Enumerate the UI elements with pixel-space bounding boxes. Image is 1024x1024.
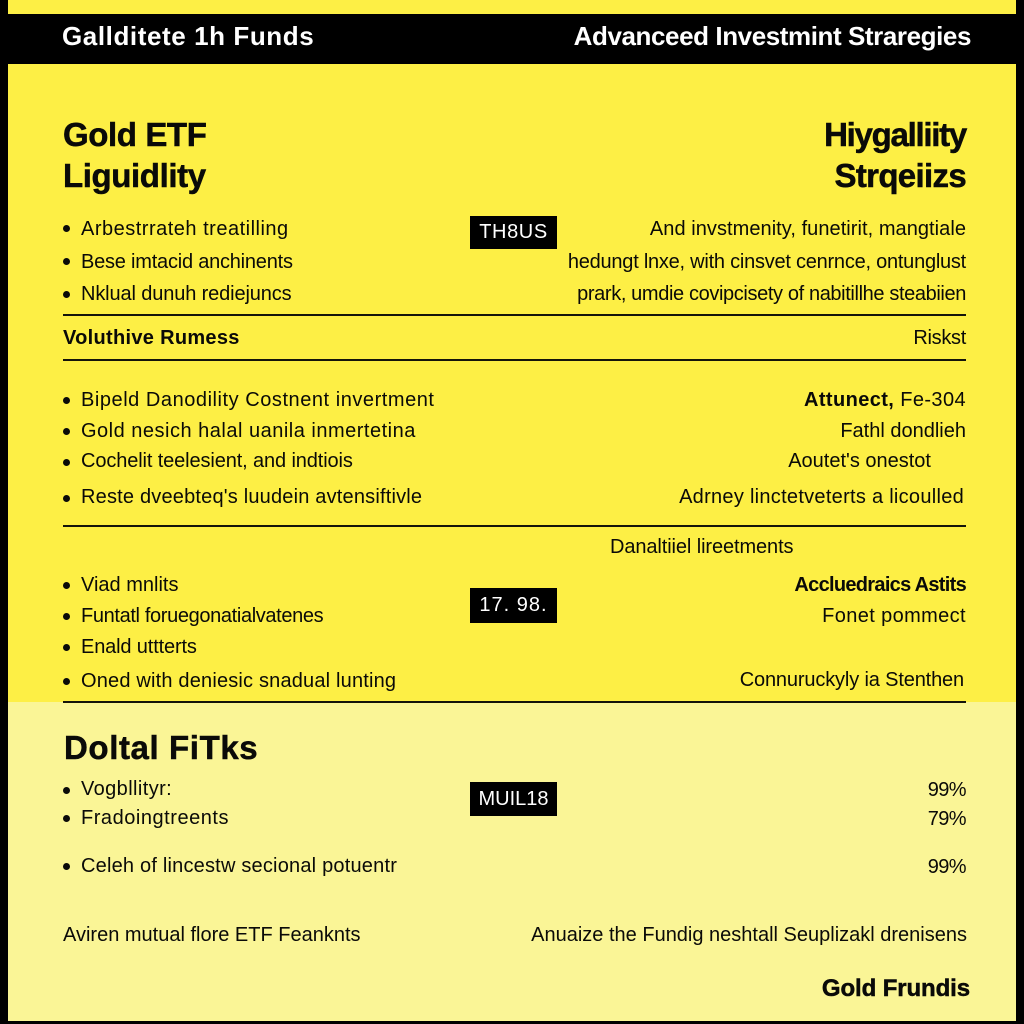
heading: Doltal FiTks: Doltal FiTks [64,729,258,766]
tag: MUIL18: MUIL18 [478,788,549,810]
list: lower left: Fradoingtreents [81,807,229,829]
panel: top yellow sliver [8,0,1016,14]
footer note right: Anuaize the Fundig neshtall Seuplizakl drenisens [531,924,967,946]
footer note left: Aviren mutual flore ETF Feanknts [63,924,361,946]
list: left group 2: Gold nesich halal uanila inmertetina [81,420,416,442]
list: left group 1: Bese imtacid anchinents [81,251,293,273]
list: left group 3: Funtatl foruegonatialvatenes [81,605,323,627]
divider row: Voluthive Rumess [63,314,966,361]
list: lower left: Vogbllityr: [81,778,172,800]
list: lower left: Celeh of lincestw secional potuentr [81,855,397,877]
list: left group 2: Cochelit teelesient, and indtiois [81,450,353,472]
list: left group 1: Arbestrrateh treatilling [81,218,289,240]
divider row: Voluthive Rumess: Riskst [913,327,966,349]
list: left group 3: Viad mnlits [81,574,178,596]
text: right group 1: And invstmenity, funetirit, mangtiale [650,218,966,240]
header left title: Gallditete 1h Funds [62,21,314,51]
tag: TH8 US [470,216,557,249]
list: right group 2: Attunect, Fe-304 [804,389,966,411]
list: left group 2 [63,389,434,508]
list: left group 3: Oned with deniesic snadual lunting [81,670,396,692]
tag: TH8 US: TH8US [479,221,548,243]
panel: main yellow [8,64,1016,702]
list: right group 3: Accluedraics Astits [794,574,966,596]
heading right line 1: Hiygalliity [824,116,966,153]
list: right group 2 [679,389,966,508]
heading right line 2: Strqeiizs [834,157,966,194]
list: left group 2: Reste dveebteq's luudein avtensiftivle [81,486,422,508]
panel: header bar [0,14,1024,64]
list: right group 3: Fonet pommect [822,605,966,627]
heading left [63,116,206,194]
list: right group 2: Fathl dondlieh [840,420,966,442]
list: left group 2: Bipeld Danodility Costnent invertment [81,389,434,411]
panel: pale yellow lower [8,702,1016,1021]
list: right group 3 [740,574,966,691]
percent values: 79% [928,808,966,830]
subheading: Danaltiiel lireetments: Danaltiiel lireetments [610,536,793,558]
list: right group 2: Aoutet's onestot [788,450,931,472]
list: left group 3 [63,574,396,692]
divider [63,701,966,703]
list: right group 3: Connuruckyly ia Stenthen [740,669,964,691]
list: left group 3: Enald uttterts [81,636,197,658]
list: lower left [63,778,397,877]
footer brand: Gold Frundis [822,975,970,1002]
text: right group 1: hedungt lnxe, with cinsvet cenrnce, ontunglust [568,251,966,273]
tag: MUIL18 [470,782,557,816]
tag: 17.98: 17. 98. [479,594,548,616]
heading left: Liguidlity [63,157,206,194]
percent values: 99% [928,779,966,801]
list: left group 1 [63,218,293,305]
header right title: Advanceed Investmint Straregies [574,21,971,51]
heading left: Gold ETF [63,116,206,153]
list: right group 2: Adrney linctetveterts a licoulled [679,486,964,508]
divider row: Voluthive Rumess: Voluthive Rumess [63,327,240,349]
divider [63,525,966,527]
percent values [928,779,966,878]
text: right group 1 [568,218,966,305]
percent values: 99% [928,856,966,878]
list: left group 1: Nklual dunuh rediejuncs [81,283,291,305]
text: right group 1: prark, umdie covipcisety of nabitillhe steabiien [577,283,966,305]
tag: 17.98 [470,588,557,623]
